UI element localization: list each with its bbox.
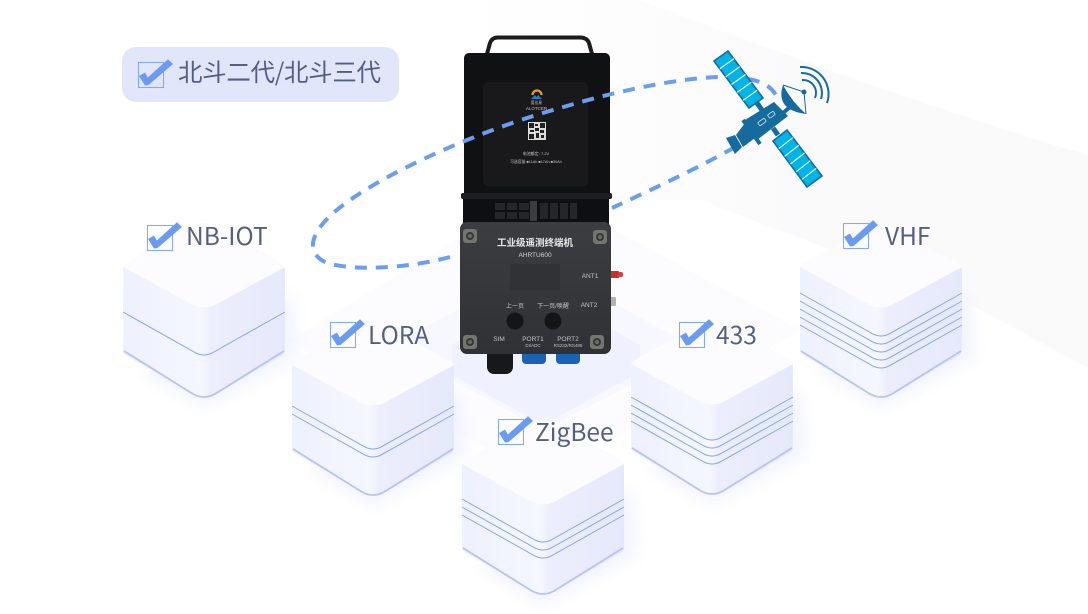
label: ZigBee [535,414,614,449]
label: RS232/RS485: RS232/RS485 [554,343,583,348]
QR code [528,122,546,140]
satellite body [726,102,790,154]
corner screws [463,229,607,349]
button: next [544,312,562,330]
cube [292,321,467,506]
block: NB-IOT [123,218,298,408]
label: ANT1: ANT1 [582,273,599,280]
label: 433 [716,317,757,352]
icon: checkbox [138,59,173,88]
rear panel [461,53,612,199]
block: LORA [292,317,467,506]
antenna connectors [610,271,623,306]
badge text: 北斗二代/北斗三代 [178,54,381,89]
brand wordmark: ALOTCER [526,106,548,111]
device title: 工业级遥测终端机 [497,237,573,249]
badge: 北斗二代/北斗三代 [122,47,399,102]
connector bracket [463,195,609,227]
icon: checkbox [498,416,533,444]
model number: AHRTU600 [518,252,552,259]
label: LORA [368,317,429,352]
label: PORT2: PORT2 [557,336,579,343]
dish antenna [781,85,806,114]
cube [631,320,806,505]
solar panel: lower [773,130,822,187]
signal waves [800,67,829,103]
label: SIM: SIM [493,336,505,343]
display screen [510,264,560,290]
capacity option text: 可选容量 ■11Ah ■17Ah ■30Ah [510,159,562,164]
label: DI/ADC: DI/ADC [525,343,541,348]
block: VHF [800,218,975,408]
front panel [460,222,611,354]
button label: previous: 上一页 [506,302,524,310]
orbit: dashed path [313,77,778,268]
battery rating text: 电池额定: 7.2V [523,150,550,156]
icon: checkbox [680,319,714,348]
logo [531,90,542,99]
icon: checkbox [844,220,878,248]
icon: satellite [714,51,829,187]
label: ANT2: ANT2 [581,302,598,309]
block: 433 [631,317,806,505]
handle [487,38,592,54]
cable glands [487,348,580,374]
button: previous [506,312,524,330]
button label: next: 下一页/唤醒 [537,302,569,310]
cube [123,223,298,408]
device: telemetry terminal [460,38,623,374]
label: VHF [885,218,930,253]
label: PORT1: PORT1 [522,336,544,343]
block: ZigBee [462,414,637,605]
icon: checkbox [148,222,182,250]
label: NB-IOT [186,218,268,253]
cube [800,223,975,408]
cube [462,420,637,605]
solar panel: upper [714,51,763,108]
icon: checkbox [330,319,365,348]
brand text: 爱佳易 [531,100,542,105]
